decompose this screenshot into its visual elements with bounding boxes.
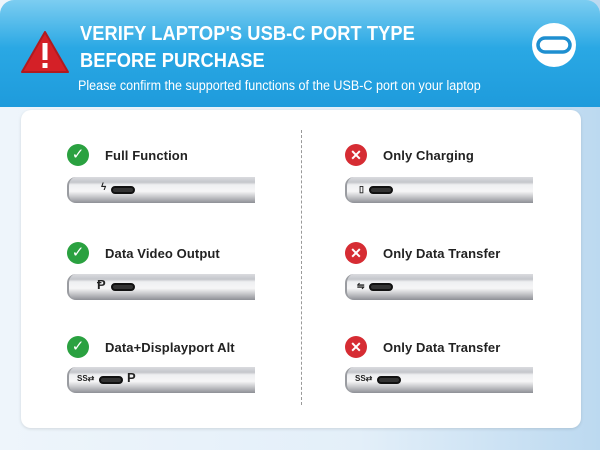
title: BEFORE PURCHASE <box>80 49 265 72</box>
icon: usb-c port <box>532 23 576 67</box>
item: full function <box>67 144 255 203</box>
title <box>80 22 415 72</box>
item: only data transfer 1: ⇋ <box>357 281 365 291</box>
item: full function: ✓ <box>72 146 84 163</box>
subtitle: Please confirm the supported functions of the USB-C port on your laptop <box>78 78 481 93</box>
item: data video output <box>67 242 255 300</box>
header banner <box>0 0 600 107</box>
item: data video output: Ᵽ <box>97 277 106 292</box>
item: only data transfer 2: Only Data Transfer <box>383 340 500 355</box>
item: data+displayport alt <box>67 336 255 393</box>
item: only charging: Only Charging <box>383 148 474 163</box>
icon: warning triangle <box>21 31 69 73</box>
item: only data transfer 1: ✕ <box>350 245 362 261</box>
panel: content card <box>21 110 581 428</box>
item: full function: ϟ <box>101 182 106 193</box>
item: only data transfer 2 <box>345 336 533 393</box>
item: data video output: ✓ <box>72 244 84 261</box>
item: data+displayport alt: Data+Displayport Alt <box>105 340 235 355</box>
item: only charging <box>345 144 533 203</box>
item: only data transfer 1: Only Data Transfer <box>383 246 500 261</box>
divider <box>301 130 302 405</box>
item: data+displayport alt: SS⇄ <box>77 374 94 383</box>
item: only data transfer 2: SS⇄ <box>355 374 372 383</box>
item: only charging: ▯ <box>359 184 364 194</box>
item: only data transfer 2: ✕ <box>350 339 362 355</box>
item: data+displayport alt: ✓ <box>72 338 84 355</box>
item: only data transfer 1 <box>345 242 533 300</box>
item: data+displayport alt: P <box>127 370 136 385</box>
item: data video output: Data Video Output <box>105 246 220 261</box>
title: VERIFY LAPTOP'S USB-C PORT TYPE <box>80 22 415 45</box>
item: only charging: ✕ <box>350 147 362 163</box>
item: full function: Full Function <box>105 148 188 163</box>
